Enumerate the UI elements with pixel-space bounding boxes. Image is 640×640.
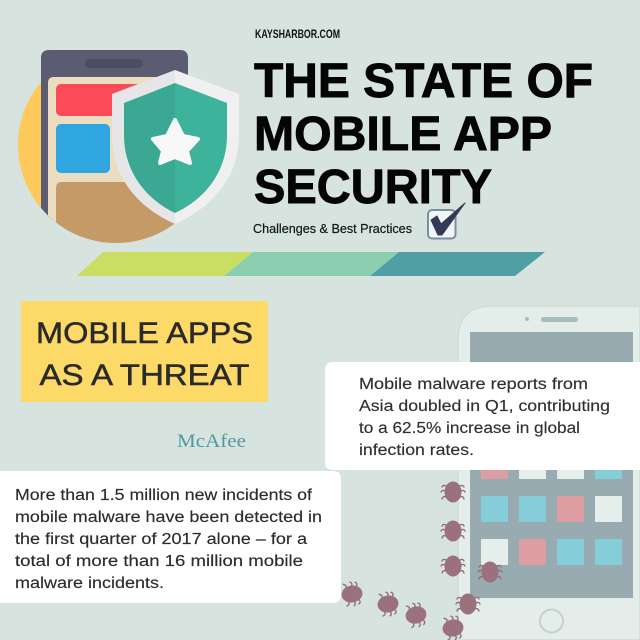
title: THE STATE OF bbox=[254, 55, 593, 108]
illustration: smartphone with app grid bbox=[458, 306, 640, 640]
title bbox=[254, 55, 593, 214]
callout: new malware incidents bbox=[0, 471, 341, 603]
heading: mobile apps as a threat bbox=[21, 301, 268, 402]
icon: phone with security shield bbox=[18, 47, 239, 250]
icon: checkbox bbox=[428, 203, 465, 238]
site name: KAYSHARBOR.COM bbox=[255, 27, 340, 41]
heading: mobile apps as a threat: AS A THREAT bbox=[40, 359, 250, 392]
source: McAfee: McAfee bbox=[177, 431, 246, 452]
callout: Asia malware reports: Mobile malware reports from bbox=[359, 376, 588, 393]
callout: new malware incidents: malware incidents. bbox=[15, 575, 164, 592]
app icon grid bbox=[481, 453, 622, 565]
subtitle: Challenges & Best Practices bbox=[253, 222, 412, 236]
callout: Asia malware reports: to a 62.5% increase in global bbox=[359, 420, 580, 437]
title: SECURITY bbox=[254, 161, 492, 214]
callout: new malware incidents: More than 1.5 million new incidents of bbox=[15, 487, 313, 504]
callout: Asia malware reports: Asia doubled in Q1, contributing bbox=[359, 398, 610, 415]
icon: trail of malware bugs bbox=[340, 482, 502, 640]
title: MOBILE APP bbox=[254, 108, 552, 161]
heading: mobile apps as a threat: MOBILE APPS bbox=[36, 317, 253, 350]
callout: new malware incidents: the first quarter of 2017 alone – for a bbox=[15, 531, 307, 548]
callout: new malware incidents: total of more than 16 million mobile bbox=[15, 553, 303, 570]
decorative ribbon bbox=[77, 252, 545, 276]
callout: Asia malware reports: infection rates. bbox=[359, 442, 474, 459]
callout: Asia malware reports bbox=[325, 362, 640, 470]
callout: new malware incidents: mobile malware have been detected in bbox=[15, 509, 322, 526]
